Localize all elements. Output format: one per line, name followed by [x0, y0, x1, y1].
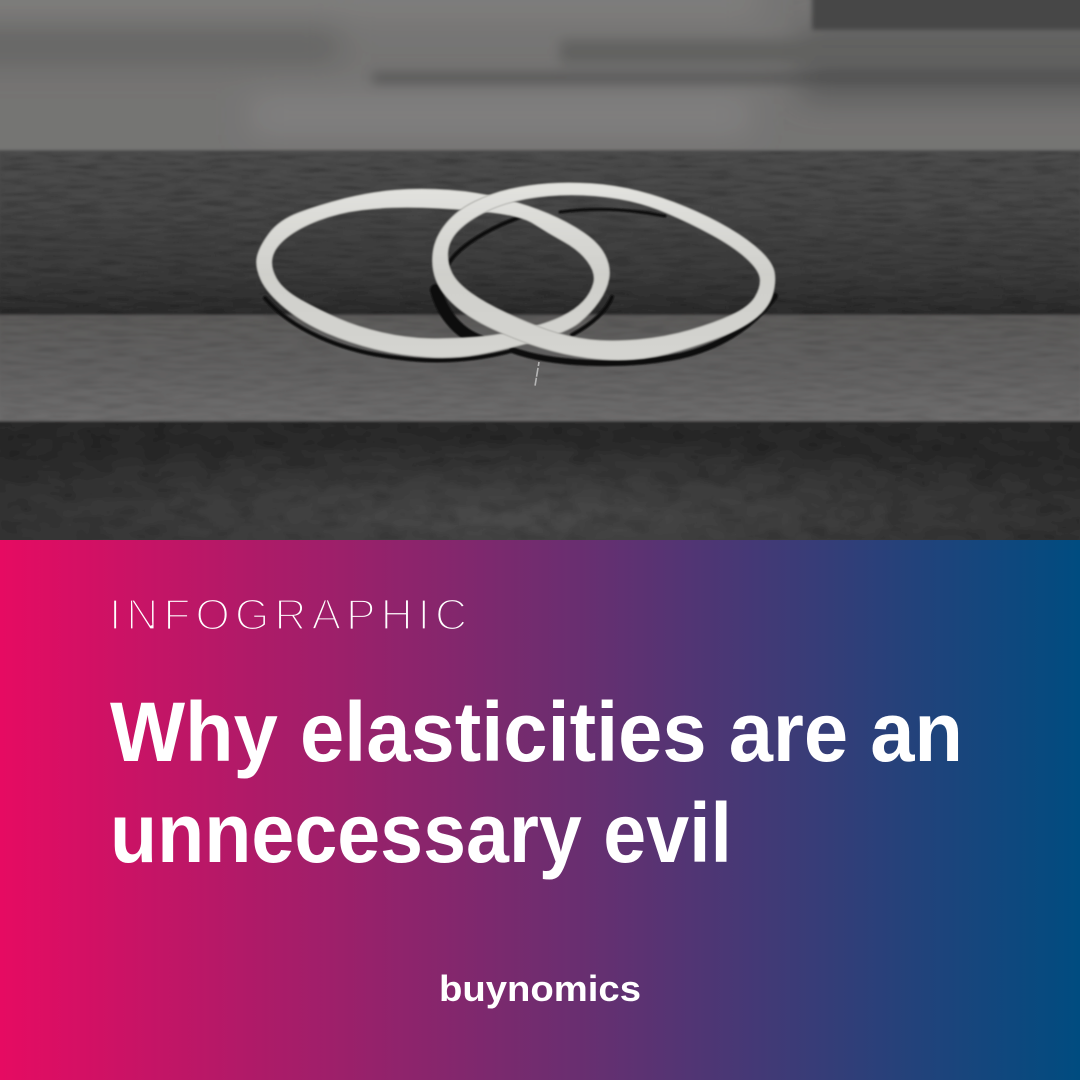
photo: rubber bands on wooden table [0, 0, 1080, 560]
background: dark foreground band [0, 422, 1080, 540]
title: unnecessary evil [110, 786, 732, 880]
scratch on table [535, 362, 539, 386]
rubber band: right ring [432, 183, 775, 360]
rubber band: left ring [256, 189, 610, 358]
background: mid-grey table band in front of rings [0, 313, 1080, 423]
panel: gradient title block [0, 540, 1080, 1080]
logo: buynomics wordmark: buynomics [439, 968, 641, 1009]
title: Why elasticities are an [110, 685, 963, 779]
background: blurred upper table band [0, 0, 1080, 150]
title [110, 685, 963, 880]
ring shadows [265, 209, 775, 363]
label: INFOGRAPHIC: INFOGRAPHIC [109, 591, 467, 639]
background: dark table band behind rings [0, 150, 1080, 314]
background: table surface bands [0, 0, 1080, 560]
